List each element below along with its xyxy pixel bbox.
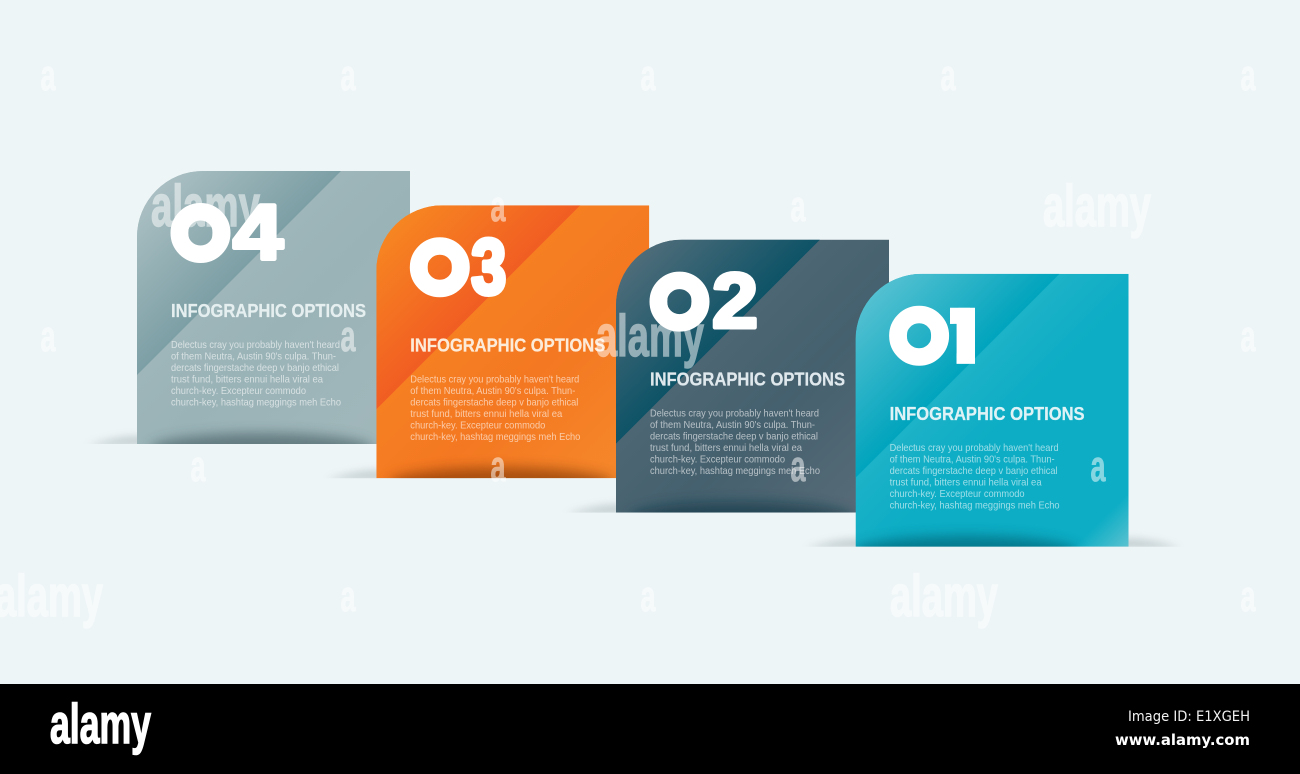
body text 02: church-key, hashtag meggings meh Echo [650,466,820,477]
body text 01: dercats fingerstache deep v banjo ethical [890,466,1058,477]
number 02 [656,257,758,345]
number 02: O [656,269,703,336]
watermark layer: alamy [1043,174,1151,239]
body text 02: church-key. Excepteur commodo [650,455,785,466]
number 04: O [177,200,224,267]
footer bar [0,684,1300,774]
watermark layer: alamy [596,304,704,369]
panel: step 02 [566,240,889,534]
body text 02 [650,409,820,477]
floor shadow 04 [94,433,137,444]
body text 02: trust fund, bitters ennui hella viral ea [650,443,802,454]
body text 03: church-key. Excepteur commodo [410,420,546,431]
body text 01: Delectus cray you probably haven't heard [890,443,1059,454]
watermark layer [0,51,1256,629]
image id: Image ID: E1XGEH [1128,709,1250,725]
heading 01: INFOGRAPHIC OPTIONS [890,403,1085,424]
footer logo: alamy [50,692,151,755]
watermark layer: a [40,51,56,100]
number 04 [177,188,283,276]
watermark layer: a [1240,572,1256,621]
body text 02: Delectus cray you probably haven't heard [650,409,819,420]
number 04: 4 [233,188,283,276]
card 04 body [137,171,410,465]
body text 04: church-key, hashtag meggings meh Echo [171,398,341,408]
watermark layer: a [490,442,506,491]
heading 02: INFOGRAPHIC OPTIONS [650,369,845,390]
floor shadow 03 [326,470,476,480]
watermark layer: a [1240,51,1256,100]
website: www.alamy.com [1115,731,1250,749]
body text 03: of them Neutra, Austin 90's culpa. Thun- [410,386,575,397]
card 03 body [376,205,649,499]
card 02 body [616,240,889,534]
watermark layer: a [940,51,956,100]
number 03 [416,222,506,310]
body text 04: of them Neutra, Austin 90's culpa. Thun- [171,352,336,362]
watermark layer: alamy [151,174,260,239]
body text 02: of them Neutra, Austin 90's culpa. Thun- [650,420,815,431]
body text 01: church-key. Excepteur commodo [890,489,1025,500]
body text 04: church-key. Excepteur commodo [171,386,306,397]
body text 02: dercats fingerstache deep v banjo ethical [650,432,818,443]
body text 03: trust fund, bitters ennui hella viral ea [410,409,563,420]
heading 04: INFOGRAPHIC OPTIONS [171,300,366,321]
number 02: 2 [712,257,758,345]
watermark layer: a [340,312,356,361]
floor shadow 01 [806,539,1181,549]
body text 01 [890,443,1060,511]
body text 01: trust fund, bitters ennui hella viral ea [890,477,1042,488]
watermark layer: a [340,572,356,621]
body text 04: trust fund, bitters ennui hella viral ea [171,374,323,386]
panel: step 04 [87,171,410,465]
body text 03: dercats fingerstache deep v banjo ethical [410,397,578,408]
panel: step 01 [812,274,1175,547]
heading 03: INFOGRAPHIC OPTIONS [410,334,605,355]
number 01 [889,306,975,366]
body text 03 [410,374,581,443]
card 01 body [854,274,1129,568]
body text 01: of them Neutra, Austin 90's culpa. Thun- [890,454,1055,465]
watermark layer: a [640,572,656,621]
body text 04 [171,340,341,408]
number 03: O [416,234,463,301]
watermark layer: a [190,442,206,491]
watermark layer: a [790,442,806,491]
body text 03: church-key, hashtag meggings meh Echo [410,432,581,443]
number 03: 3 [471,222,506,310]
watermark layer: a [340,51,356,100]
floor shadow 02 [572,502,616,512]
number 01: 1 [946,292,980,381]
number 01: O [896,303,942,370]
watermark layer: a [790,182,806,231]
panel: step 03 [326,205,649,499]
body text 04: dercats fingerstache deep v banjo ethical [171,363,339,374]
watermark layer: a [40,312,56,361]
body text 04: Delectus cray you probably haven't heard [171,340,340,351]
watermark layer: a [640,51,656,100]
body text 03: Delectus cray you probably haven't heard [410,374,580,385]
watermark layer: alamy [890,564,998,629]
watermark layer: a [1090,442,1106,491]
watermark layer: a [490,182,506,231]
watermark layer: a [1240,312,1256,361]
body text 01: church-key, hashtag meggings meh Echo [890,500,1060,511]
